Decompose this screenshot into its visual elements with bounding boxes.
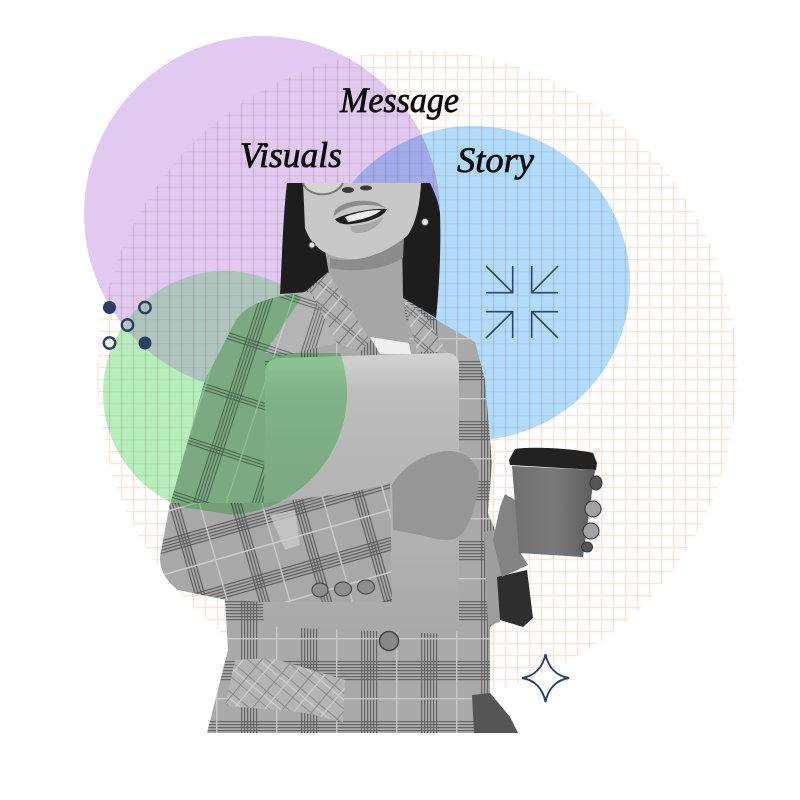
teeth — [345, 210, 381, 222]
hair — [280, 183, 440, 318]
neck — [325, 235, 410, 344]
jacket button — [380, 632, 398, 650]
smile — [335, 209, 387, 224]
photo: woman holding laptop and coffee — [160, 182, 602, 733]
sleeve — [160, 483, 392, 602]
hand holding cup — [493, 494, 528, 577]
nostrils — [342, 186, 372, 193]
lapel left — [310, 272, 370, 352]
overlaps of the circles — [124, 134, 440, 382]
label: Message: Message — [339, 80, 459, 120]
label: Story: Story — [457, 140, 534, 180]
sleeve highlight fold — [270, 510, 300, 550]
dark cuff — [497, 570, 533, 627]
cup body — [512, 466, 595, 557]
hand on laptop — [392, 451, 478, 540]
jacket dark side — [472, 693, 518, 733]
lower lip — [350, 217, 383, 233]
laptop — [263, 353, 459, 634]
lapel right — [403, 298, 447, 352]
sleeve buttons — [312, 580, 374, 597]
pocket flap — [225, 658, 345, 722]
green tint on jacket and laptop — [170, 294, 347, 515]
circle: story blue — [316, 126, 630, 440]
peach grid blob — [90, 40, 750, 710]
icon: four-point star — [522, 654, 569, 702]
cup lid — [509, 448, 597, 470]
white shirt — [370, 337, 411, 354]
grid over circles — [103, 58, 630, 502]
glasses — [303, 183, 343, 194]
face — [303, 183, 421, 259]
upper lip — [333, 201, 386, 217]
circle: green — [103, 271, 347, 515]
jaw shadow — [330, 238, 404, 270]
upper arm — [170, 292, 337, 505]
icon: inward arrows — [486, 266, 558, 338]
earrings — [309, 218, 428, 248]
jacket body — [170, 272, 518, 733]
label: Visuals: Visuals — [240, 135, 342, 175]
fingers — [582, 476, 602, 552]
right sleeve — [484, 530, 502, 626]
circle: visuals purple — [84, 36, 440, 392]
icon: dots — [103, 301, 152, 350]
